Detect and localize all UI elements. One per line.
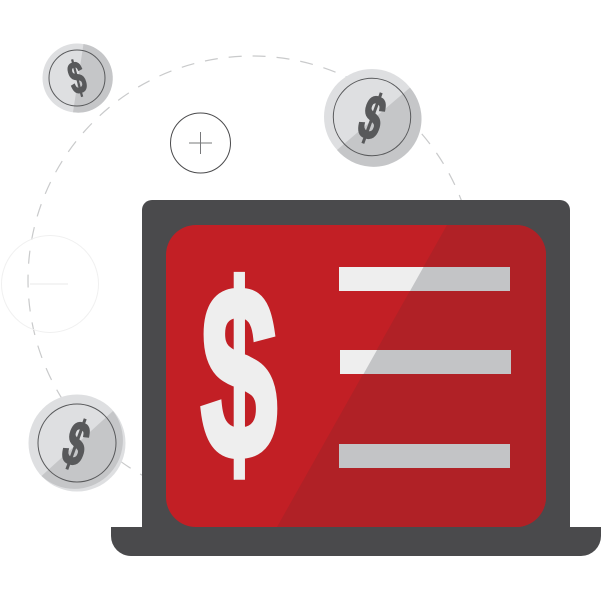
icon: minus circle [2, 236, 98, 332]
laptop base [111, 527, 601, 556]
laptop screen frame [142, 200, 570, 530]
icon: large coin bottom left [28, 394, 126, 492]
red display panel [166, 225, 546, 527]
list bar 2 [340, 350, 511, 374]
icon: small coin top left [42, 44, 113, 113]
list bar 3 [339, 444, 510, 468]
icon: large coin top right: $ [350, 81, 394, 156]
laptop [111, 200, 601, 556]
list bar 1 [339, 267, 510, 291]
icon: large coin bottom left: $ [54, 407, 98, 482]
large dollar sign: $ [201, 237, 277, 511]
icon: large coin top right [324, 69, 422, 167]
display shadow [277, 225, 546, 527]
icon: plus circle [170, 113, 230, 173]
icon: small coin top left: $ [63, 51, 91, 105]
